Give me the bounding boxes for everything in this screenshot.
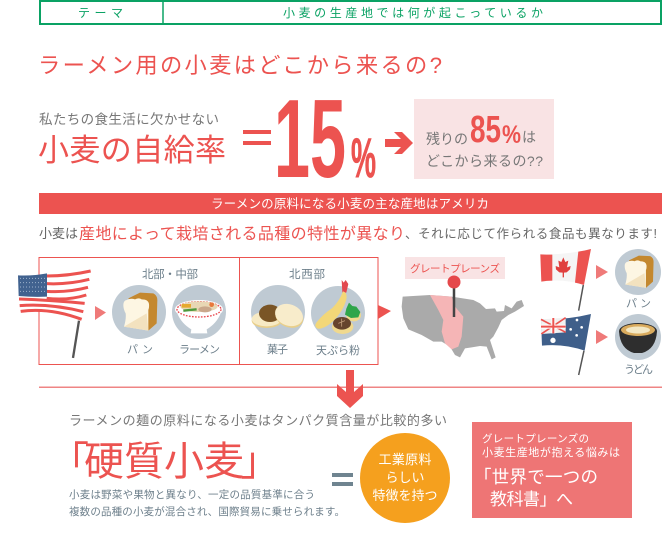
icon: ramen	[172, 285, 226, 339]
hard wheat title	[49, 440, 280, 484]
red banner: ラーメンの原料になる小麦の主な産地はアメリカ	[211, 197, 489, 211]
icon: bread	[112, 285, 166, 339]
panel: remaining 85 percent: %	[502, 121, 521, 149]
gray equals sign	[332, 473, 353, 486]
map: United States with Great Plains	[402, 295, 524, 359]
arrow: US to regions	[95, 306, 106, 320]
label: Great Plains	[405, 257, 505, 279]
hard wheat title: 」	[240, 440, 280, 484]
arrow: Australia to udon	[596, 330, 608, 344]
self-sufficiency label: 小麦の自給率	[38, 133, 226, 168]
panel: US regions	[39, 257, 378, 365]
region label: northwest: 北西部	[289, 268, 326, 281]
label: bread: パ ン	[127, 343, 153, 356]
panel: remaining 85 percent	[414, 99, 554, 179]
panel: remaining 85 percent: 85	[470, 109, 501, 151]
icon: bread Canada	[615, 249, 661, 295]
hard wheat description: 小麦は野菜や果物と異なり、一定の品質基準に合う	[69, 488, 315, 501]
icon: map pin	[448, 276, 460, 317]
15 percent figure: 15	[274, 77, 346, 201]
region label: north and central: 北部・中部	[142, 268, 198, 281]
hard wheat title: 硬質小麦	[84, 440, 244, 484]
explanatory sentence: 小麦は	[39, 226, 78, 241]
icon: udon bowl	[615, 314, 661, 360]
equals sign	[243, 130, 271, 145]
self-sufficiency lead text: 私たちの食生活に欠かせない	[39, 112, 219, 127]
panel: remaining 85 percent: どこから来るの??	[426, 153, 543, 169]
theme header bar	[40, 1, 661, 24]
arrow: Canada to bread	[596, 265, 608, 279]
orange circle: characteristics: 特徴を持つ	[372, 488, 438, 503]
label: sweets: 菓子	[267, 343, 288, 356]
label: Great Plains: グレートプレーンズ	[410, 262, 500, 275]
orange circle: characteristics: らしい	[386, 470, 424, 485]
theme header bar: テーマ	[78, 6, 123, 20]
label: tempura flour: 天ぷら粉	[316, 344, 360, 357]
label: udon: うどん	[624, 363, 653, 376]
hard wheat description	[69, 488, 345, 518]
main heading: ラーメン用の小麦はどこから来るの?	[38, 53, 442, 78]
panel: Great Plains concern	[472, 422, 632, 518]
icon: Australian flag	[541, 314, 591, 375]
hard wheat description: 複数の品種の小麦が混合され、国際貿易に乗せられます。	[69, 505, 345, 518]
explanatory sentence: 産地によって栽培される品種の特性が異なり	[79, 225, 405, 243]
explanatory sentence: 、それに応じて作られる食品も異なります!	[405, 227, 657, 241]
arrow to remaining share	[385, 132, 413, 154]
orange circle: characteristics	[360, 433, 450, 523]
orange circle: characteristics: 工業原料	[378, 452, 432, 467]
panel: Great Plains concern: 教科書」へ	[490, 490, 573, 509]
panel: remaining 85 percent: は	[522, 129, 536, 145]
label: bread Canada: パ ン	[626, 297, 651, 310]
icon: Canadian flag	[540, 249, 591, 311]
hard wheat title: 「	[49, 440, 89, 484]
icon: sweets	[251, 285, 306, 339]
panel: Great Plains concern: 「世界で一つの	[474, 467, 598, 487]
hard wheat lead text: ラーメンの麺の原料になる小麦はタンパク質含量が比較的多い	[69, 413, 447, 428]
15 percent figure: %	[351, 126, 376, 189]
red banner	[39, 193, 662, 214]
theme header bar: 小麦の生産地では何が起こっているか	[283, 5, 543, 20]
panel: Great Plains concern: グレートプレーンズの	[482, 432, 589, 445]
icon: US flag	[18, 270, 91, 358]
panel: Great Plains concern: 小麦生産地が抱える悩みは	[482, 445, 620, 459]
panel: remaining 85 percent: 残りの	[426, 131, 468, 147]
icon: tempura	[311, 280, 365, 340]
arrow: regions to map	[378, 305, 391, 319]
explanatory sentence	[39, 225, 657, 243]
label: ramen: ラーメン	[179, 344, 220, 356]
divider with down arrow	[39, 370, 662, 408]
